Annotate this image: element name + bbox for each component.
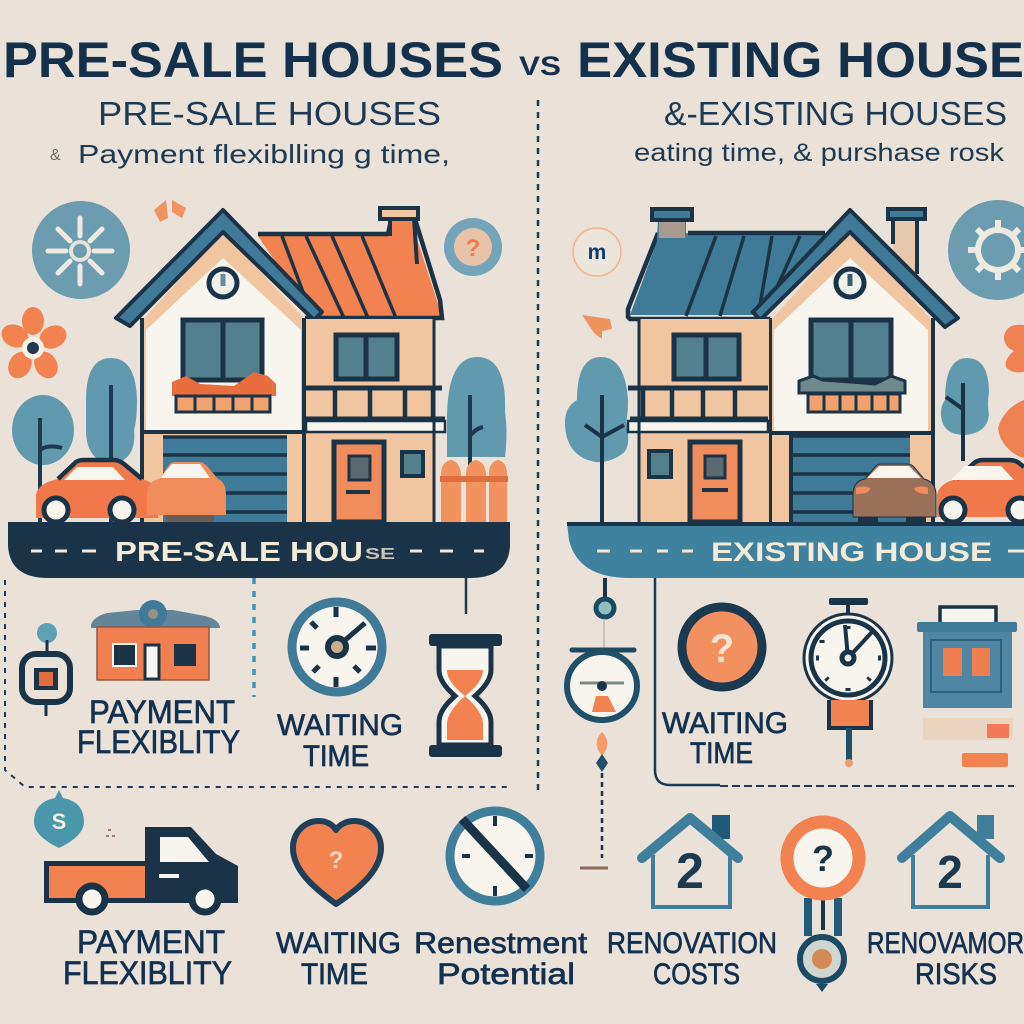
icon: heart: [293, 821, 381, 904]
icon: clock: [292, 602, 382, 692]
left banner: [8, 522, 510, 578]
label: payment flexibility: FLEXIBLITY: [77, 724, 240, 760]
left banner: SE: [365, 546, 395, 563]
left trees: [12, 357, 506, 522]
icon: small pin: [22, 623, 70, 716]
label: investment potential: [414, 927, 588, 991]
icon: small brown specks: [106, 830, 118, 836]
left panel frame: [5, 580, 507, 787]
left banner: PRE-SALE HOU: [115, 536, 363, 567]
icon: truck: [44, 827, 238, 912]
icon: small orange house: [91, 600, 220, 680]
label: waiting time right: WAITING: [662, 707, 788, 740]
label: investment potential: Potential: [437, 958, 575, 991]
left cars: [36, 460, 226, 522]
label: waiting time right: [662, 707, 788, 770]
right heading: &-EXISTING HOUSES: [664, 95, 1007, 132]
label: payment flexibility lower: PAYMENT: [77, 924, 225, 960]
title: VS: [519, 51, 561, 81]
label: waiting time lower: TIME: [301, 958, 368, 991]
illustration: existing house: [628, 209, 958, 522]
left heading: PRE-SALE HOUSES: [98, 95, 441, 132]
label: waiting time left: [277, 709, 403, 773]
wall: [771, 232, 932, 522]
upper window: [183, 320, 262, 380]
label: waiting time left: WAITING: [277, 709, 403, 742]
right heading: [634, 95, 1007, 167]
blue roof: [630, 233, 830, 315]
icon: house question: [902, 815, 1000, 907]
icon: right sun badge: [948, 200, 1024, 300]
icon: small orange flag: [582, 315, 612, 339]
right heading: eating time, & purshase rosk: [634, 139, 1005, 167]
label: waiting time lower: [276, 927, 401, 991]
title: EXISTING HOUSE: [577, 32, 1024, 88]
roundel: [209, 269, 237, 297]
icon: right flower: [998, 325, 1024, 458]
icon: stopwatch: [804, 598, 892, 767]
icon: question clock with pendulum: ?: [812, 838, 834, 879]
right banner: [567, 523, 1024, 578]
right panel frame: [655, 578, 720, 785]
icon: right pin badge: m: [588, 241, 606, 264]
title: [3, 32, 1024, 88]
icon: left flower: [0, 307, 70, 383]
icon: right pin badge: [573, 228, 621, 276]
label: renovation costs: RENOVATION: [607, 927, 777, 960]
icon: dollar tag: [34, 790, 84, 848]
illustration: pre-sale house: [116, 208, 445, 522]
icon: dollar tag: S: [52, 809, 66, 834]
left fence: [440, 460, 508, 522]
right banner: EXISTING HOUSE: [711, 537, 992, 567]
icon: question clock with pendulum: [787, 822, 859, 992]
left heading: [50, 95, 450, 169]
icon: hourglass: [429, 634, 502, 757]
wing: [306, 319, 434, 522]
icon: orange question circle: [682, 607, 762, 687]
left heading: Payment flexiblling g time,: [78, 139, 450, 169]
icon: box panel: [917, 607, 1017, 767]
label: waiting time right: TIME: [690, 737, 753, 770]
icon: gauge with connector: [567, 578, 637, 868]
wing: [640, 319, 769, 522]
label: payment flexibility: PAYMENT: [89, 694, 235, 730]
right cars: [853, 460, 1024, 523]
icon: house 2: [642, 815, 738, 907]
label: renovation risks: RISKS: [915, 958, 997, 991]
garage: [163, 437, 287, 522]
label: investment potential: Renestment: [414, 927, 588, 960]
icon: left orange badge: ?: [466, 235, 480, 262]
title: PRE-SALE HOUSES: [3, 32, 503, 88]
label: waiting time lower: WAITING: [276, 927, 401, 960]
chimney back: [893, 218, 917, 274]
icon: left sun badge: [32, 201, 130, 299]
label: payment flexibility lower: FLEXIBLITY: [63, 955, 232, 991]
orange roof: [258, 236, 442, 316]
right trees: [565, 357, 989, 522]
icon: orange question circle: ?: [710, 627, 734, 671]
icon: left orange blot: [154, 200, 186, 222]
gable roof: [753, 210, 958, 327]
icon: house 2: 2: [676, 843, 704, 899]
label: payment flexibility: [77, 694, 240, 760]
icon: house question: 2: [937, 846, 963, 898]
label: renovation risks: [867, 927, 1024, 991]
label: waiting time left: TIME: [303, 740, 369, 773]
left heading: &: [50, 147, 61, 164]
icon: crossed clock: [450, 811, 540, 901]
icon: heart: ?: [329, 847, 343, 874]
label: payment flexibility lower: [63, 924, 232, 991]
gable roof: [116, 210, 322, 326]
label: renovation costs: [607, 927, 777, 991]
label: renovation costs: COSTS: [653, 958, 740, 991]
left wall: [143, 232, 303, 522]
icon: left orange badge: [444, 218, 502, 276]
